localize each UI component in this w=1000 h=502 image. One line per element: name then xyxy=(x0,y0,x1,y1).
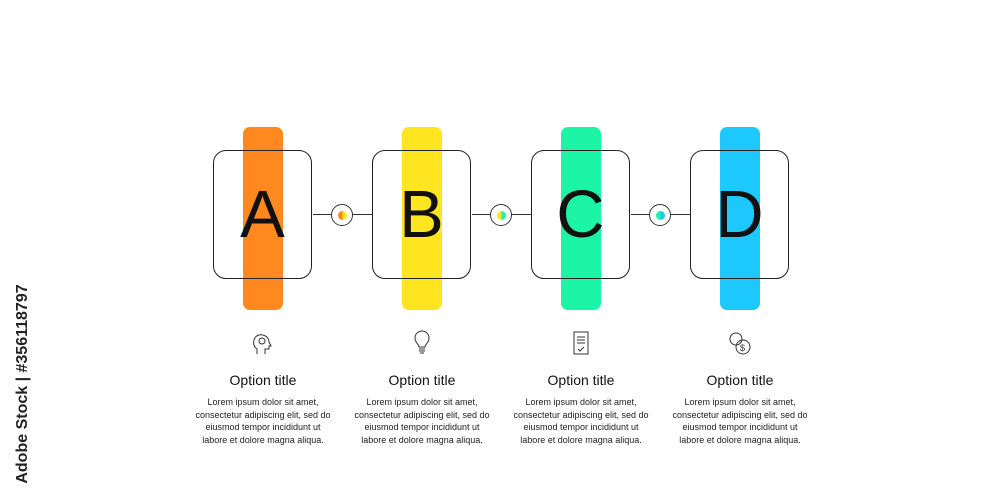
step D: D xyxy=(715,177,764,252)
column B xyxy=(354,330,490,445)
title A: Option title xyxy=(230,372,296,388)
watermark id: Adobe Stock | #356118797 xyxy=(14,284,31,484)
step A: A xyxy=(240,177,285,252)
icon: coins xyxy=(730,332,750,354)
text B: eiusmod tempor incididunt ut xyxy=(364,422,480,432)
text B: Lorem ipsum dolor sit amet, xyxy=(366,397,478,407)
icon: coins: $ xyxy=(740,343,745,353)
connector dot A-B xyxy=(331,204,353,226)
step B xyxy=(372,127,471,310)
icon: head gear xyxy=(253,334,272,354)
column D xyxy=(672,332,808,445)
icon: document xyxy=(574,332,588,354)
connector dot C-D xyxy=(649,204,671,226)
connector dot B-C xyxy=(490,204,512,226)
step A xyxy=(213,127,312,310)
text B xyxy=(354,397,490,445)
text D: labore et dolore magna aliqua. xyxy=(679,434,801,444)
text C: Lorem ipsum dolor sit amet, xyxy=(525,397,637,407)
text A xyxy=(195,397,331,445)
icon: bulb xyxy=(414,330,430,354)
text D: eiusmod tempor incididunt ut xyxy=(682,422,798,432)
title B: Option title xyxy=(389,372,455,388)
text D: Lorem ipsum dolor sit amet, xyxy=(684,397,796,407)
column A xyxy=(195,334,331,445)
step C: C xyxy=(556,177,605,252)
text B: labore et dolore magna aliqua. xyxy=(361,434,483,444)
title D: Option title xyxy=(707,372,773,388)
step C xyxy=(531,127,630,310)
step B: B xyxy=(399,177,444,252)
text A: labore et dolore magna aliqua. xyxy=(202,434,324,444)
title C: Option title xyxy=(548,372,614,388)
text A: Lorem ipsum dolor sit amet, xyxy=(207,397,319,407)
text D: consectetur adipiscing elit, sed do xyxy=(672,410,808,420)
column C xyxy=(513,332,649,445)
text A: eiusmod tempor incididunt ut xyxy=(205,422,321,432)
text C xyxy=(513,397,649,445)
step D xyxy=(690,127,789,310)
text C: labore et dolore magna aliqua. xyxy=(520,434,642,444)
text C: eiusmod tempor incididunt ut xyxy=(523,422,639,432)
text C: consectetur adipiscing elit, sed do xyxy=(513,410,649,420)
text D xyxy=(672,397,808,445)
text B: consectetur adipiscing elit, sed do xyxy=(354,410,490,420)
text A: consectetur adipiscing elit, sed do xyxy=(195,410,331,420)
